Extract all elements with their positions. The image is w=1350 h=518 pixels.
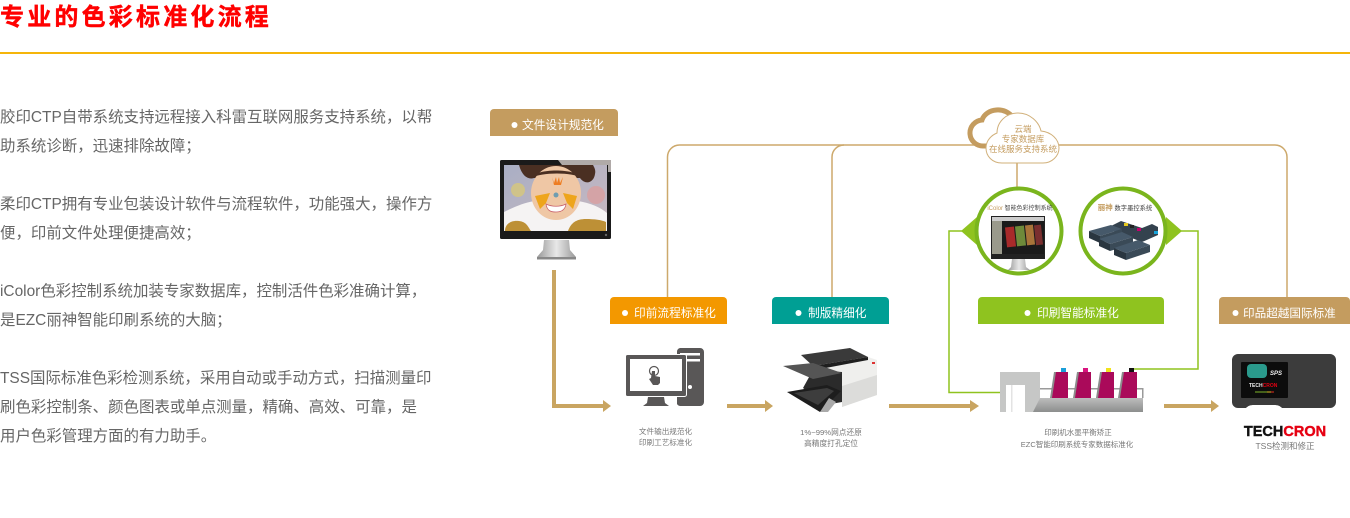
label: file design — [490, 109, 618, 136]
label: prepress — [610, 297, 727, 324]
icon: iColor monitor — [991, 216, 1045, 270]
paragraph: CTP remote support: 助系统诊断，迅速排除故障； — [0, 134, 201, 156]
connector: left green loop — [949, 231, 1007, 392]
icon: TSS device: SPS — [1270, 371, 1282, 377]
connector: cloud service lines — [668, 145, 1287, 297]
connector: right green loop — [1134, 231, 1198, 369]
label: plate making — [772, 297, 889, 324]
paragraph: flexo CTP — [0, 192, 432, 243]
caption: prepress: 文件输出规范化 — [639, 426, 692, 436]
paragraph: TSS: TSS国际标准色彩检测系统，采用自动或手动方式，扫描测量印 — [0, 366, 431, 388]
cloud caption: 专家数据库 — [1002, 134, 1045, 144]
icon: CTP printer — [783, 348, 877, 412]
icon: desktop computer — [626, 348, 704, 406]
label: intelligent printing — [978, 297, 1164, 324]
paragraph: TSS: 刷色彩控制条、颜色图表或单点测量，精确、高效、可靠，是 — [0, 395, 417, 417]
label: beyond international standard: 印品超越国际标准 — [1243, 306, 1336, 320]
paragraph: flexo CTP: 便，印前文件处理便捷高效； — [0, 221, 201, 243]
logo: TECHCRON: TECHCRON — [1244, 424, 1326, 440]
text block: description — [0, 105, 432, 445]
icon: cloud — [970, 110, 1059, 163]
caption: plate making: 高精度打孔定位 — [804, 438, 858, 448]
cloud caption: 在线服务支持系统 — [989, 144, 1057, 154]
iColor heading: iColor 智能色彩控制系统 — [987, 204, 1053, 212]
title: 专业的色彩标准化流程 — [0, 4, 272, 31]
paragraph: TSS: 用户色彩管理方面的有力助手。 — [0, 428, 216, 445]
label: prepress: 印前流程标准化 — [634, 306, 716, 320]
paragraph: CTP remote support — [0, 105, 432, 156]
caption: prepress: 印刷工艺标准化 — [639, 437, 692, 447]
circle: iColor system — [961, 188, 1062, 274]
icon: monitor with child photo — [500, 160, 611, 260]
arrow: design to prepress — [552, 270, 611, 412]
arrow: prepress to plate — [727, 400, 773, 412]
cloud caption: 云端 — [1014, 124, 1032, 134]
caption: printing: 印刷机水墨平衡矫正 — [1044, 427, 1112, 437]
icon: ink control units — [1089, 221, 1158, 260]
label: file design: 文件设计规范化 — [522, 118, 604, 132]
icon: printing press — [1000, 368, 1144, 412]
paragraph: flexo CTP: 柔印CTP拥有专业包装设计软件与流程软件，功能强大，操作方 — [0, 192, 432, 214]
caption: printing: EZC智能印刷系统专家数据标准化 — [1021, 439, 1134, 449]
icon: TSS device: TECHCRON — [1249, 383, 1278, 389]
paragraph: iColor: iColor色彩控制系统加装专家数据库，控制活件色彩准确计算， — [0, 279, 426, 301]
paragraph: iColor: 是EZC丽神智能印刷系统的大脑； — [0, 308, 232, 330]
caption: inspection: TSS检测和修正 — [1255, 441, 1315, 451]
paragraph: CTP remote support: 胶印CTP自带系统支持远程接入科雷互联网服务支持系统，以帮 — [0, 105, 432, 127]
label: beyond international standard — [1219, 297, 1350, 324]
icon: TSS device — [1232, 354, 1336, 408]
caption: plate making: 1%~99%网点还原 — [800, 427, 862, 437]
paragraph: iColor — [0, 279, 426, 330]
circle: digital ink control system — [1080, 188, 1182, 274]
digital ink heading: 丽神 数字墨控系统 — [1098, 202, 1153, 212]
paragraph: TSS — [0, 366, 431, 445]
label: intelligent printing: 印刷智能标准化 — [1037, 306, 1119, 320]
label: plate making: 制版精细化 — [808, 306, 867, 320]
arrow: plate to press — [889, 400, 979, 412]
arrow: press to inspection — [1164, 400, 1219, 412]
